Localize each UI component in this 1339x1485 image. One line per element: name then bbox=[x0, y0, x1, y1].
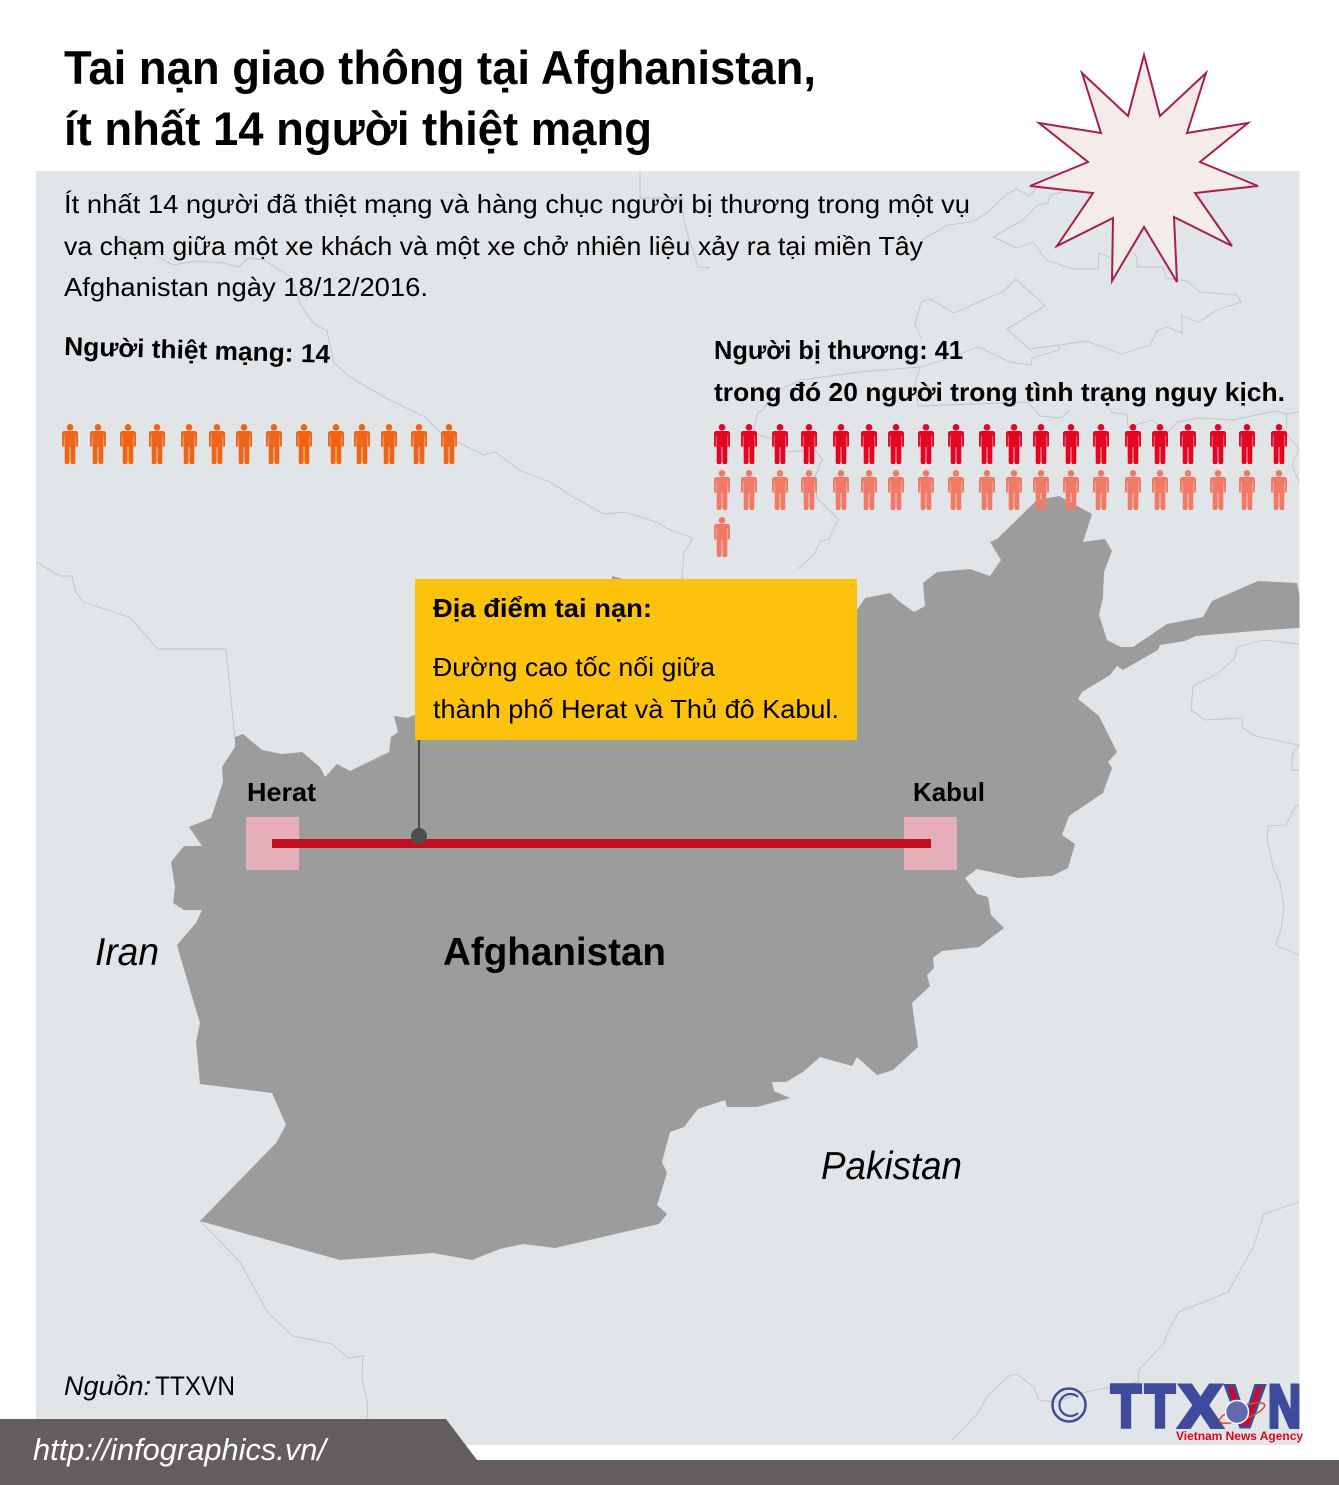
heading: injured: trong đó 20 người trong tình trạng nguy kịch. bbox=[714, 377, 1285, 407]
callout: accident location: thành phố Herat và Thủ đô Kabul. bbox=[433, 694, 839, 724]
label: Afghanistan: Afghanistan bbox=[443, 931, 666, 974]
city marker: Kabul bbox=[904, 777, 985, 870]
pictogram: 20 critically injured bbox=[714, 424, 1287, 464]
source bbox=[64, 1371, 235, 1401]
logo: TTXVN: V bbox=[1225, 1373, 1265, 1440]
intro text: Afghanistan ngày 18/12/2016. bbox=[64, 272, 428, 302]
pictogram: 14 deaths bbox=[62, 424, 457, 464]
callout: accident location bbox=[415, 579, 857, 740]
logo: TTXVN: T bbox=[1111, 1373, 1141, 1440]
callout: accident location: Đường cao tốc nối giữa bbox=[433, 652, 716, 682]
intro text: va chạm giữa một xe khách và một xe chở nhiên liệu xảy ra tại miền Tây bbox=[64, 231, 923, 261]
title bbox=[64, 41, 816, 155]
callout: accident location: Địa điểm tai nạn: bbox=[433, 593, 652, 623]
logo: TTXVN: Vietnam News Agency bbox=[1176, 1431, 1304, 1443]
logo: TTXVN: N bbox=[1268, 1373, 1301, 1440]
footer url: http://infographics.vn/ bbox=[33, 1432, 329, 1467]
pictogram: 21 other injured bbox=[714, 470, 1287, 557]
intro text bbox=[64, 189, 970, 302]
label: Pakistan: Pakistan bbox=[821, 1145, 962, 1188]
intro text: Ít nhất 14 người đã thiệt mạng và hàng chục người bị thương trong một vụ bbox=[64, 189, 970, 219]
source: Nguồn: bbox=[64, 1371, 151, 1401]
city marker: Herat bbox=[246, 777, 316, 870]
title: Tai nạn giao thông tại Afghanistan, bbox=[64, 41, 816, 94]
source: TTXVN bbox=[155, 1371, 235, 1401]
logo: TTXVN: T bbox=[1145, 1373, 1175, 1440]
route line: Herat to Kabul bbox=[272, 839, 931, 848]
logo: TTXVN: X bbox=[1179, 1373, 1222, 1440]
heading: injured: Người bị thương: 41 bbox=[714, 335, 963, 365]
map: Afghanistan bbox=[171, 496, 1300, 1260]
logo: TTXVN bbox=[1111, 1373, 1304, 1443]
city marker: Kabul: Kabul bbox=[913, 777, 985, 807]
icon: explosion star bbox=[1030, 55, 1258, 282]
heading: deaths: Người thiệt mạng: 14 bbox=[64, 331, 331, 369]
heading: injured bbox=[714, 335, 1285, 407]
accident pin bbox=[411, 740, 427, 844]
city marker: Herat: Herat bbox=[247, 777, 316, 807]
footer bar bbox=[0, 1419, 1339, 1485]
icon: copyright bbox=[1052, 1388, 1086, 1422]
title: ít nhất 14 người thiệt mạng bbox=[64, 102, 652, 155]
label: Iran: Iran bbox=[95, 931, 159, 974]
